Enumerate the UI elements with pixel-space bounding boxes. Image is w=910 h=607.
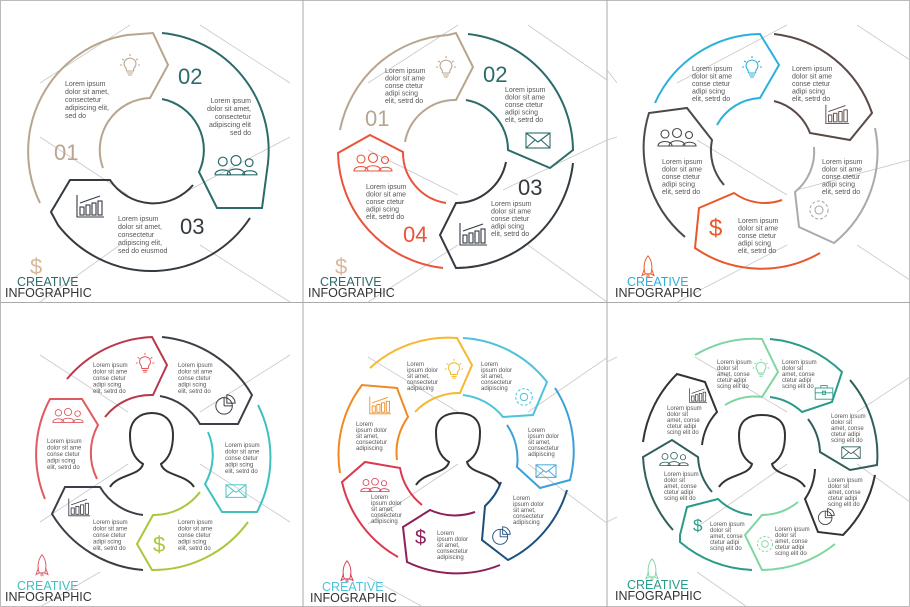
text blocks: dolor sit ame xyxy=(47,446,82,452)
icons xyxy=(445,359,463,378)
segment mint bottom xyxy=(745,502,835,570)
text blocks: adipi scing xyxy=(491,224,524,230)
text blocks: adipi scing xyxy=(178,382,206,388)
text blocks: dolor sit ame xyxy=(366,192,406,198)
brand: INFOGRAPHIC xyxy=(308,286,395,300)
text blocks: elit, setrd do xyxy=(792,96,830,103)
segment dark teal right xyxy=(808,380,877,470)
text blocks: dolor sit ame xyxy=(662,166,702,174)
icon: people xyxy=(660,452,688,466)
text blocks xyxy=(366,68,546,238)
icon: envelope xyxy=(842,447,860,458)
brand: INFOGRAPHIC xyxy=(615,286,702,300)
text blocks: adipi scing xyxy=(505,110,538,116)
text blocks: scing elit do xyxy=(782,384,814,390)
text blocks: scing elit do xyxy=(717,384,749,390)
segment dark red xyxy=(67,337,167,417)
text blocks xyxy=(664,360,866,557)
text blocks: conse ctetur xyxy=(178,533,211,539)
text blocks: elit, setrd do xyxy=(822,189,860,196)
text blocks: dolor sit ame xyxy=(822,166,862,174)
segment 02 teal xyxy=(466,34,573,168)
text blocks: Lorem ipsum xyxy=(47,439,82,445)
text blocks: dolor sit xyxy=(828,484,849,490)
text blocks: adipi scing xyxy=(385,90,418,98)
text blocks: Lorem ipsum xyxy=(225,443,260,449)
segment navy xyxy=(482,482,567,560)
text block 01: adipiscing elit, xyxy=(65,105,109,112)
text blocks: Lorem ipsum xyxy=(93,363,128,369)
text blocks: amet, conse xyxy=(782,372,815,378)
text blocks xyxy=(47,363,260,552)
text blocks: Lorem ipsum xyxy=(738,218,779,225)
icon: dollar: $ xyxy=(693,516,703,535)
text blocks: Lorem xyxy=(528,428,545,434)
person xyxy=(719,415,805,487)
text blocks: amet, conse xyxy=(717,372,750,378)
text blocks: sit amet, xyxy=(481,374,504,380)
text blocks: Lorem xyxy=(356,422,373,428)
text block 01: consectetur xyxy=(65,97,102,104)
icon: briefcase xyxy=(815,386,833,399)
text blocks: dolor sit xyxy=(775,533,796,539)
brand: INFOGRAPHIC xyxy=(5,286,92,300)
text blocks: elit, setrd do xyxy=(225,469,258,475)
icons xyxy=(753,359,769,376)
text blocks: Lorem ipsum xyxy=(93,520,128,526)
text blocks: conse ctetur xyxy=(366,199,405,206)
icon: chart xyxy=(826,105,849,124)
text blocks: Lorem ipsum xyxy=(822,159,863,166)
brand: CREATIVE xyxy=(322,580,384,594)
panel 3: five-step cycle xyxy=(607,25,910,302)
brand: INFOGRAPHIC xyxy=(615,589,702,603)
brand: CREATIVE xyxy=(17,275,79,289)
text blocks: dolor sit ame xyxy=(93,526,128,532)
text blocks: amet, conse xyxy=(664,484,697,490)
icon: dollar: $ xyxy=(335,254,347,279)
text blocks: ctetur adipi xyxy=(775,545,804,551)
text blocks: elit, setrd do xyxy=(93,546,126,552)
text blocks xyxy=(356,362,559,561)
icon: gear xyxy=(516,389,532,405)
segment dark xyxy=(644,108,724,237)
text blocks: sit amet, xyxy=(407,374,430,380)
text blocks: ipsum dolor xyxy=(528,434,559,440)
text blocks: dolor sit ame xyxy=(738,226,778,232)
numbers: 03 xyxy=(518,175,542,200)
text blocks: conse ctetur xyxy=(93,376,126,382)
icon: pie xyxy=(216,395,235,414)
icon: rocket xyxy=(646,559,658,580)
text blocks: elit, setrd do xyxy=(47,465,80,471)
icon: chart xyxy=(460,223,487,245)
segment yellow xyxy=(370,338,472,412)
text blocks: conse ctetur xyxy=(822,174,861,181)
text blocks: ctetur adipi xyxy=(710,540,739,546)
text block 01: sed do xyxy=(65,113,86,120)
segment cyan xyxy=(655,34,779,125)
segment orange xyxy=(695,193,820,269)
text blocks: adipi scing xyxy=(822,182,855,188)
brand: CREATIVE xyxy=(320,275,382,289)
icon: people xyxy=(361,478,389,492)
text blocks: Lorem ipsum xyxy=(385,68,426,75)
text blocks: consectetur xyxy=(371,513,402,519)
icons xyxy=(436,56,456,77)
text blocks: elit, setrd do xyxy=(738,248,776,255)
text blocks: adipiscing xyxy=(481,386,508,392)
panel 5: seven-step cycle with person xyxy=(310,338,608,607)
text blocks: Lorem ipsum xyxy=(491,201,532,208)
text blocks: elit, setrd do xyxy=(366,214,404,221)
text blocks: dolor sit xyxy=(782,366,803,372)
text blocks: Lorem ipsum xyxy=(667,406,702,412)
text blocks: dolor sit xyxy=(831,420,852,426)
icon: gear xyxy=(758,536,772,552)
text blocks: dolor sit ame xyxy=(178,370,213,376)
brand: INFOGRAPHIC xyxy=(310,591,397,605)
panel 2: four-step cycle xyxy=(308,25,607,302)
text blocks: consectetur xyxy=(513,514,544,520)
text blocks: elit, setrd do xyxy=(385,98,423,105)
text blocks: conse ctetur xyxy=(692,81,731,88)
numbers: 01 xyxy=(365,106,389,131)
text blocks: Lorem ipsum xyxy=(792,66,833,73)
segment 01 beige xyxy=(28,33,168,203)
segment teal xyxy=(205,405,270,512)
text blocks: adipi scing xyxy=(93,540,121,546)
icon: people xyxy=(53,408,83,422)
text blocks: amet, conse xyxy=(831,426,864,432)
text blocks: adipiscing xyxy=(356,446,383,452)
text blocks: adipi scing xyxy=(47,458,75,464)
text blocks: elit, setrd do xyxy=(93,389,126,395)
numbers: 03 xyxy=(180,214,204,239)
text blocks: elit, setrd do xyxy=(692,96,730,103)
text blocks: scing elit do xyxy=(775,551,807,557)
segment dark xyxy=(160,337,252,424)
text block 02: consectetur xyxy=(215,114,252,121)
text blocks: Lorem ipsum xyxy=(775,527,810,533)
icon: people xyxy=(215,156,257,175)
segment blue xyxy=(507,388,574,488)
text blocks: conse ctetur xyxy=(491,216,530,223)
segment red xyxy=(342,462,422,557)
text block 02: Lorem ipsum xyxy=(211,98,251,105)
numbers: 02 xyxy=(178,64,202,89)
text blocks: adipi scing xyxy=(692,88,725,96)
text block 03: Lorem ipsum xyxy=(118,216,159,223)
text blocks: ctetur adipi xyxy=(782,378,811,384)
text blocks: ipsum dolor xyxy=(437,537,468,543)
text blocks: scing elit do xyxy=(828,502,860,508)
text blocks: dolor sit ame xyxy=(792,74,832,80)
text blocks: ipsum dolor xyxy=(356,428,387,434)
brand: CREATIVE xyxy=(17,579,79,593)
text blocks: dolor sit xyxy=(717,366,738,372)
text block 02: sed do xyxy=(230,130,251,137)
text blocks: elit, setrd do xyxy=(491,231,529,238)
text blocks: adipi scing xyxy=(225,462,253,468)
segment dark teal left xyxy=(643,440,712,530)
text blocks: adipiscing xyxy=(513,520,540,526)
segment 03 dark xyxy=(440,162,573,268)
icon: rocket xyxy=(642,256,654,277)
text block 03: adipiscing elit, xyxy=(118,240,162,247)
text blocks: adipi scing xyxy=(366,206,399,214)
text blocks: Lorem ipsum xyxy=(782,360,817,366)
text blocks: dolor sit xyxy=(664,478,685,484)
icon: dollar: $ xyxy=(153,532,165,557)
segment teal bottom-left xyxy=(680,499,752,570)
text blocks: dolor sit ame xyxy=(225,450,260,456)
icon: envelope xyxy=(526,133,550,148)
icon: pie xyxy=(818,509,834,524)
panel 1: three-step cycle xyxy=(5,25,290,302)
text blocks: dolor sit ame xyxy=(692,74,732,80)
text blocks: ipsum dolor xyxy=(407,368,438,374)
text blocks: sit amet, xyxy=(513,508,536,514)
text blocks: ipsum dolor xyxy=(481,368,512,374)
icon: rocket xyxy=(341,561,353,582)
icon: chart xyxy=(370,397,391,414)
numbers: 04 xyxy=(403,222,427,247)
text blocks: consectetur xyxy=(481,380,512,386)
text blocks: ctetur adipi xyxy=(828,496,857,502)
person xyxy=(416,413,500,485)
segment purple xyxy=(403,510,500,573)
icons xyxy=(742,56,762,77)
text blocks: ctetur adipi xyxy=(667,424,696,430)
text block 02: dolor sit amet, xyxy=(207,106,251,113)
icon: dollar: $ xyxy=(709,215,722,242)
text blocks: Lorem ipsum xyxy=(717,360,752,366)
text blocks: conse ctetur xyxy=(47,452,80,458)
text blocks: conse ctetur xyxy=(385,83,424,90)
text blocks: Lorem ipsum xyxy=(831,414,866,420)
text block 02: adipiscing elit xyxy=(209,122,251,129)
numbers xyxy=(365,62,542,247)
text blocks: ipsum dolor xyxy=(371,501,402,507)
text blocks: amet, conse xyxy=(828,490,861,496)
text blocks: Lorem xyxy=(481,362,498,368)
text blocks: consectetur xyxy=(528,446,559,452)
segment 04 red xyxy=(338,135,446,268)
text blocks: dolor sit ame xyxy=(491,208,531,216)
text blocks: dolor sit ame xyxy=(93,370,128,376)
text blocks: Lorem ipsum xyxy=(828,478,863,484)
icon: chart xyxy=(69,499,90,516)
text blocks: adipi scing xyxy=(93,382,121,388)
text blocks: ctetur adipi xyxy=(831,432,860,438)
icon: pie xyxy=(493,527,510,544)
text blocks: Lorem ipsum xyxy=(178,363,213,369)
brand: CREATIVE xyxy=(627,275,689,289)
brand: CREATIVE xyxy=(627,578,689,592)
text blocks: dolor sit ame xyxy=(385,76,425,82)
text blocks: conse ctetur xyxy=(178,376,211,382)
segment light cyan xyxy=(463,338,547,417)
text blocks: amet, conse xyxy=(710,534,743,540)
text blocks: adipiscing xyxy=(371,519,398,525)
panel 4: six-step cycle with person xyxy=(5,337,290,607)
text block 03: sed do eiusmod xyxy=(118,248,168,255)
icon: chart xyxy=(690,388,707,402)
text blocks: elit, setrd do xyxy=(178,546,211,552)
icon: rocket xyxy=(36,555,48,576)
text blocks: sit amet, xyxy=(528,440,551,446)
text blocks: scing elit do xyxy=(664,496,696,502)
text block 01: Lorem ipsum xyxy=(65,81,106,88)
text block 03: dolor sit amet, xyxy=(118,224,162,231)
brand: INFOGRAPHIC xyxy=(5,590,92,604)
segment dark top-left xyxy=(643,374,717,445)
text blocks: adipi scing xyxy=(662,182,695,188)
text blocks: sit amet, xyxy=(371,507,394,513)
icon: dollar: $ xyxy=(415,527,426,549)
numbers: 02 xyxy=(483,62,507,87)
text blocks: adipi scing xyxy=(178,540,206,546)
text blocks: conse ctetur xyxy=(792,81,831,88)
text block 01: dolor sit amet, xyxy=(65,89,109,96)
text blocks: ipsum dolor xyxy=(513,502,544,508)
segment brown xyxy=(774,34,872,140)
text blocks: scing elit do xyxy=(667,430,699,436)
text blocks: conse ctetur xyxy=(505,102,544,109)
icon: people xyxy=(658,128,696,146)
text blocks: scing elit do xyxy=(831,438,863,444)
text blocks: Lorem ipsum xyxy=(178,520,213,526)
text blocks: amet, conse xyxy=(775,539,808,545)
text blocks: Lorem xyxy=(407,362,424,368)
text blocks: conse ctetur xyxy=(662,174,701,181)
text blocks: Lorem ipsum xyxy=(505,87,546,94)
text blocks: sit amet, xyxy=(437,543,460,549)
text blocks: conse ctetur xyxy=(93,533,126,539)
text blocks: adipiscing xyxy=(437,555,464,561)
text blocks: ctetur adipi xyxy=(664,490,693,496)
text blocks xyxy=(662,66,863,255)
text blocks: Lorem xyxy=(437,531,454,537)
text blocks: conse ctetur xyxy=(225,456,258,462)
text blocks: scing elit do xyxy=(710,546,742,552)
text blocks: dolor sit ame xyxy=(505,94,545,102)
segment 03 dark xyxy=(51,180,250,271)
segment 01 beige xyxy=(340,33,473,142)
segment dark bottom-right xyxy=(805,469,875,535)
text block 03: consectetur xyxy=(118,232,155,239)
text blocks: Lorem ipsum xyxy=(710,522,745,528)
text blocks: Lorem ipsum xyxy=(664,472,699,478)
icon: envelope xyxy=(226,485,246,497)
text blocks: adipi scing xyxy=(738,240,771,248)
segment lime xyxy=(137,492,248,570)
icon: envelope xyxy=(536,465,556,477)
text blocks: Lorem ipsum xyxy=(662,159,703,166)
segment mint top xyxy=(695,339,778,405)
icon: bulb xyxy=(120,54,140,75)
text blocks: dolor sit xyxy=(710,528,731,534)
text blocks: consectetur xyxy=(356,440,387,446)
text blocks: elit, setrd do xyxy=(662,189,700,196)
segment dark lower xyxy=(52,487,143,570)
text blocks: ctetur adipi xyxy=(717,378,746,384)
text blocks: Lorem xyxy=(513,496,530,502)
text blocks: elit, setrd do xyxy=(178,389,211,395)
icon: dollar: $ xyxy=(30,254,42,279)
text blocks: Lorem xyxy=(371,495,388,501)
text blocks: adipiscing xyxy=(407,386,434,392)
numbers: 01 xyxy=(54,140,78,165)
text blocks: consectetur xyxy=(407,380,438,386)
segment gray xyxy=(795,128,877,243)
text blocks: dolor sit ame xyxy=(178,526,213,532)
text blocks: adipiscing xyxy=(528,452,555,458)
text blocks: amet, conse xyxy=(667,418,700,424)
segment orange xyxy=(339,385,408,473)
segment red xyxy=(36,399,98,499)
icons xyxy=(136,353,154,372)
text blocks: sit amet, xyxy=(356,434,379,440)
segment teal top-right xyxy=(770,339,842,412)
segment 02 teal xyxy=(162,33,269,208)
text blocks: adipi scing xyxy=(792,88,825,96)
text blocks: conse ctetur xyxy=(738,233,777,240)
text blocks: Lorem ipsum xyxy=(366,184,407,191)
numbers xyxy=(54,64,204,239)
text blocks: elit, setrd do xyxy=(505,117,543,124)
icon: people xyxy=(354,154,392,171)
icon: chart xyxy=(77,195,104,217)
text blocks: dolor sit xyxy=(667,412,688,418)
text blocks: Lorem ipsum xyxy=(692,66,733,73)
text blocks: consectetur xyxy=(437,549,468,555)
person xyxy=(110,413,194,487)
panel 6: eight-step cycle with person xyxy=(607,339,910,607)
icon: gear xyxy=(810,201,828,219)
